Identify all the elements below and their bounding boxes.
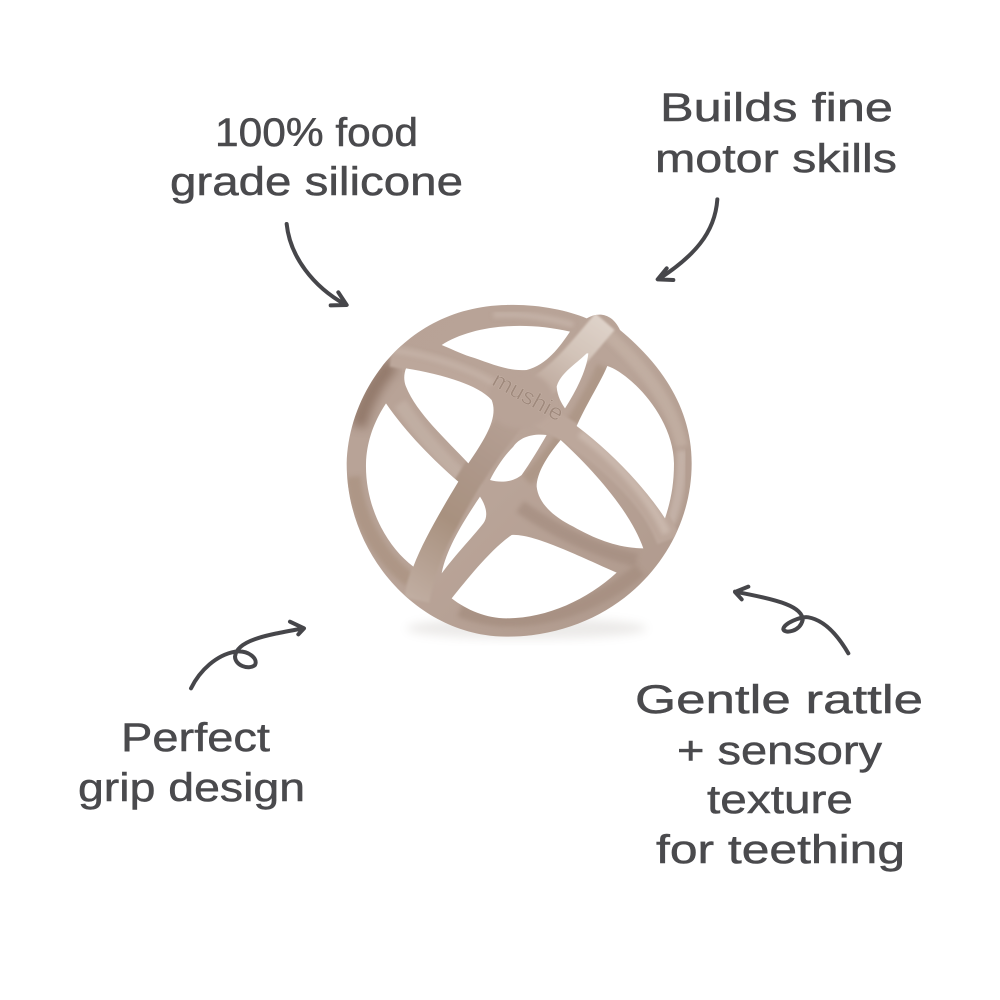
- callout: builds fine motor skills: [655, 86, 897, 181]
- ball body: [347, 305, 692, 637]
- arrow: rattle to ball: [735, 587, 848, 653]
- ball openings: [366, 326, 674, 618]
- callout: gentle rattle and sensory texture for teething: texture: [707, 778, 853, 822]
- product image: silicone sensory ball: [347, 305, 692, 639]
- callout: perfect grip design: Perfect: [121, 716, 270, 760]
- callout: 100% food grade silicone: [170, 111, 463, 204]
- arrow: food grade to ball: [287, 224, 347, 305]
- callout: perfect grip design: grip design: [78, 766, 305, 810]
- arrow: motor skills to ball: [658, 199, 717, 280]
- callout: 100% food grade silicone: 100% food: [215, 111, 418, 155]
- arrow: grip design to ball: [191, 622, 304, 688]
- callout: builds fine motor skills: Builds fine: [660, 86, 893, 130]
- callout: gentle rattle and sensory texture for teething: Gentle rattle: [635, 678, 923, 722]
- callout: gentle rattle and sensory texture for teething: + sensory: [677, 729, 882, 773]
- shading on bands: [353, 315, 682, 620]
- callout: gentle rattle and sensory texture for teething: [635, 678, 923, 872]
- callout: builds fine motor skills: motor skills: [655, 137, 897, 181]
- callout: 100% food grade silicone: grade silicone: [170, 160, 463, 204]
- embossed brand name: mushie: [488, 366, 568, 426]
- ball shadow: [407, 618, 647, 639]
- callout: perfect grip design: [78, 716, 305, 810]
- callout: gentle rattle and sensory texture for teething: for teething: [656, 828, 905, 872]
